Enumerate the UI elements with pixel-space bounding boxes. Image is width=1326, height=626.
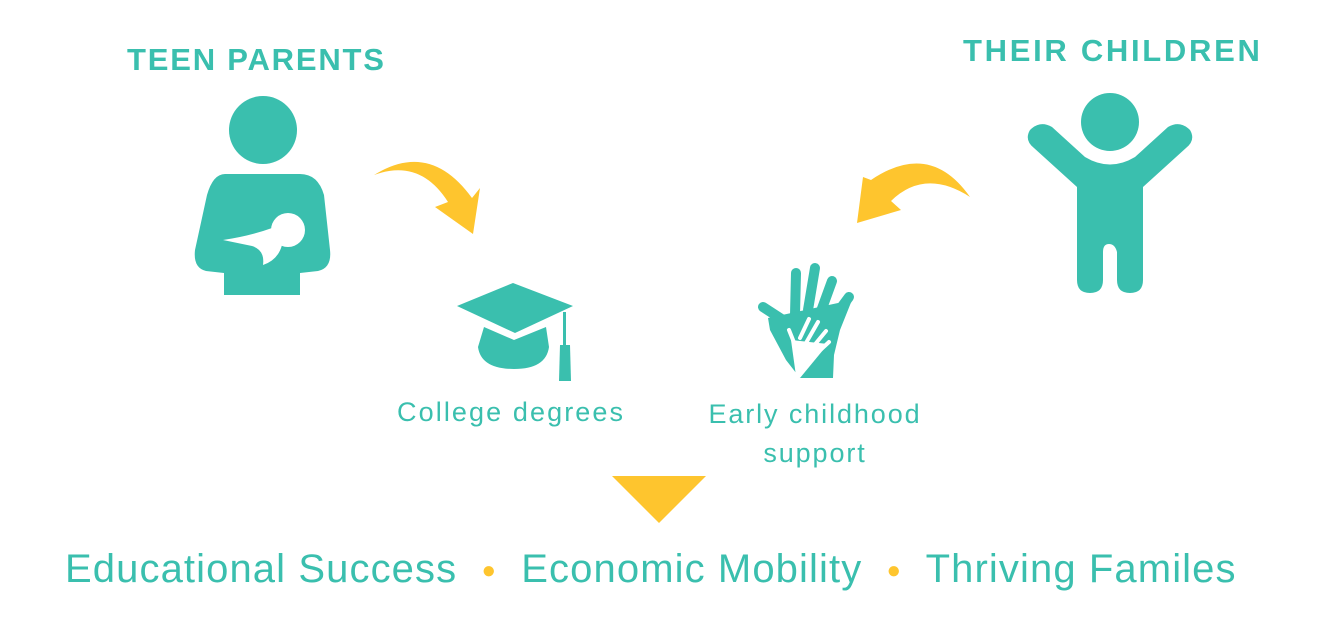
heading: teen parents: TEEN PARENTS bbox=[127, 42, 386, 77]
icon: child arms up bbox=[1028, 93, 1192, 293]
outcomes line: Educational Success ● Economic Mobility ● Thriving Familes bbox=[65, 547, 1237, 591]
heading: their children: THEIR CHILDREN bbox=[963, 33, 1263, 68]
icon: parent holding baby bbox=[195, 96, 330, 295]
label: early childhood support: Early childhood bbox=[708, 399, 922, 429]
arrow: parent to degree bbox=[374, 162, 480, 234]
label: college degrees: College degrees bbox=[397, 397, 625, 427]
icon: graduation cap bbox=[457, 283, 573, 381]
callout triangle bbox=[612, 476, 706, 523]
arrow: children to support bbox=[857, 164, 970, 223]
label: early childhood support: support bbox=[763, 438, 867, 468]
label: early childhood support bbox=[708, 399, 922, 468]
icon: hands bbox=[763, 268, 852, 378]
